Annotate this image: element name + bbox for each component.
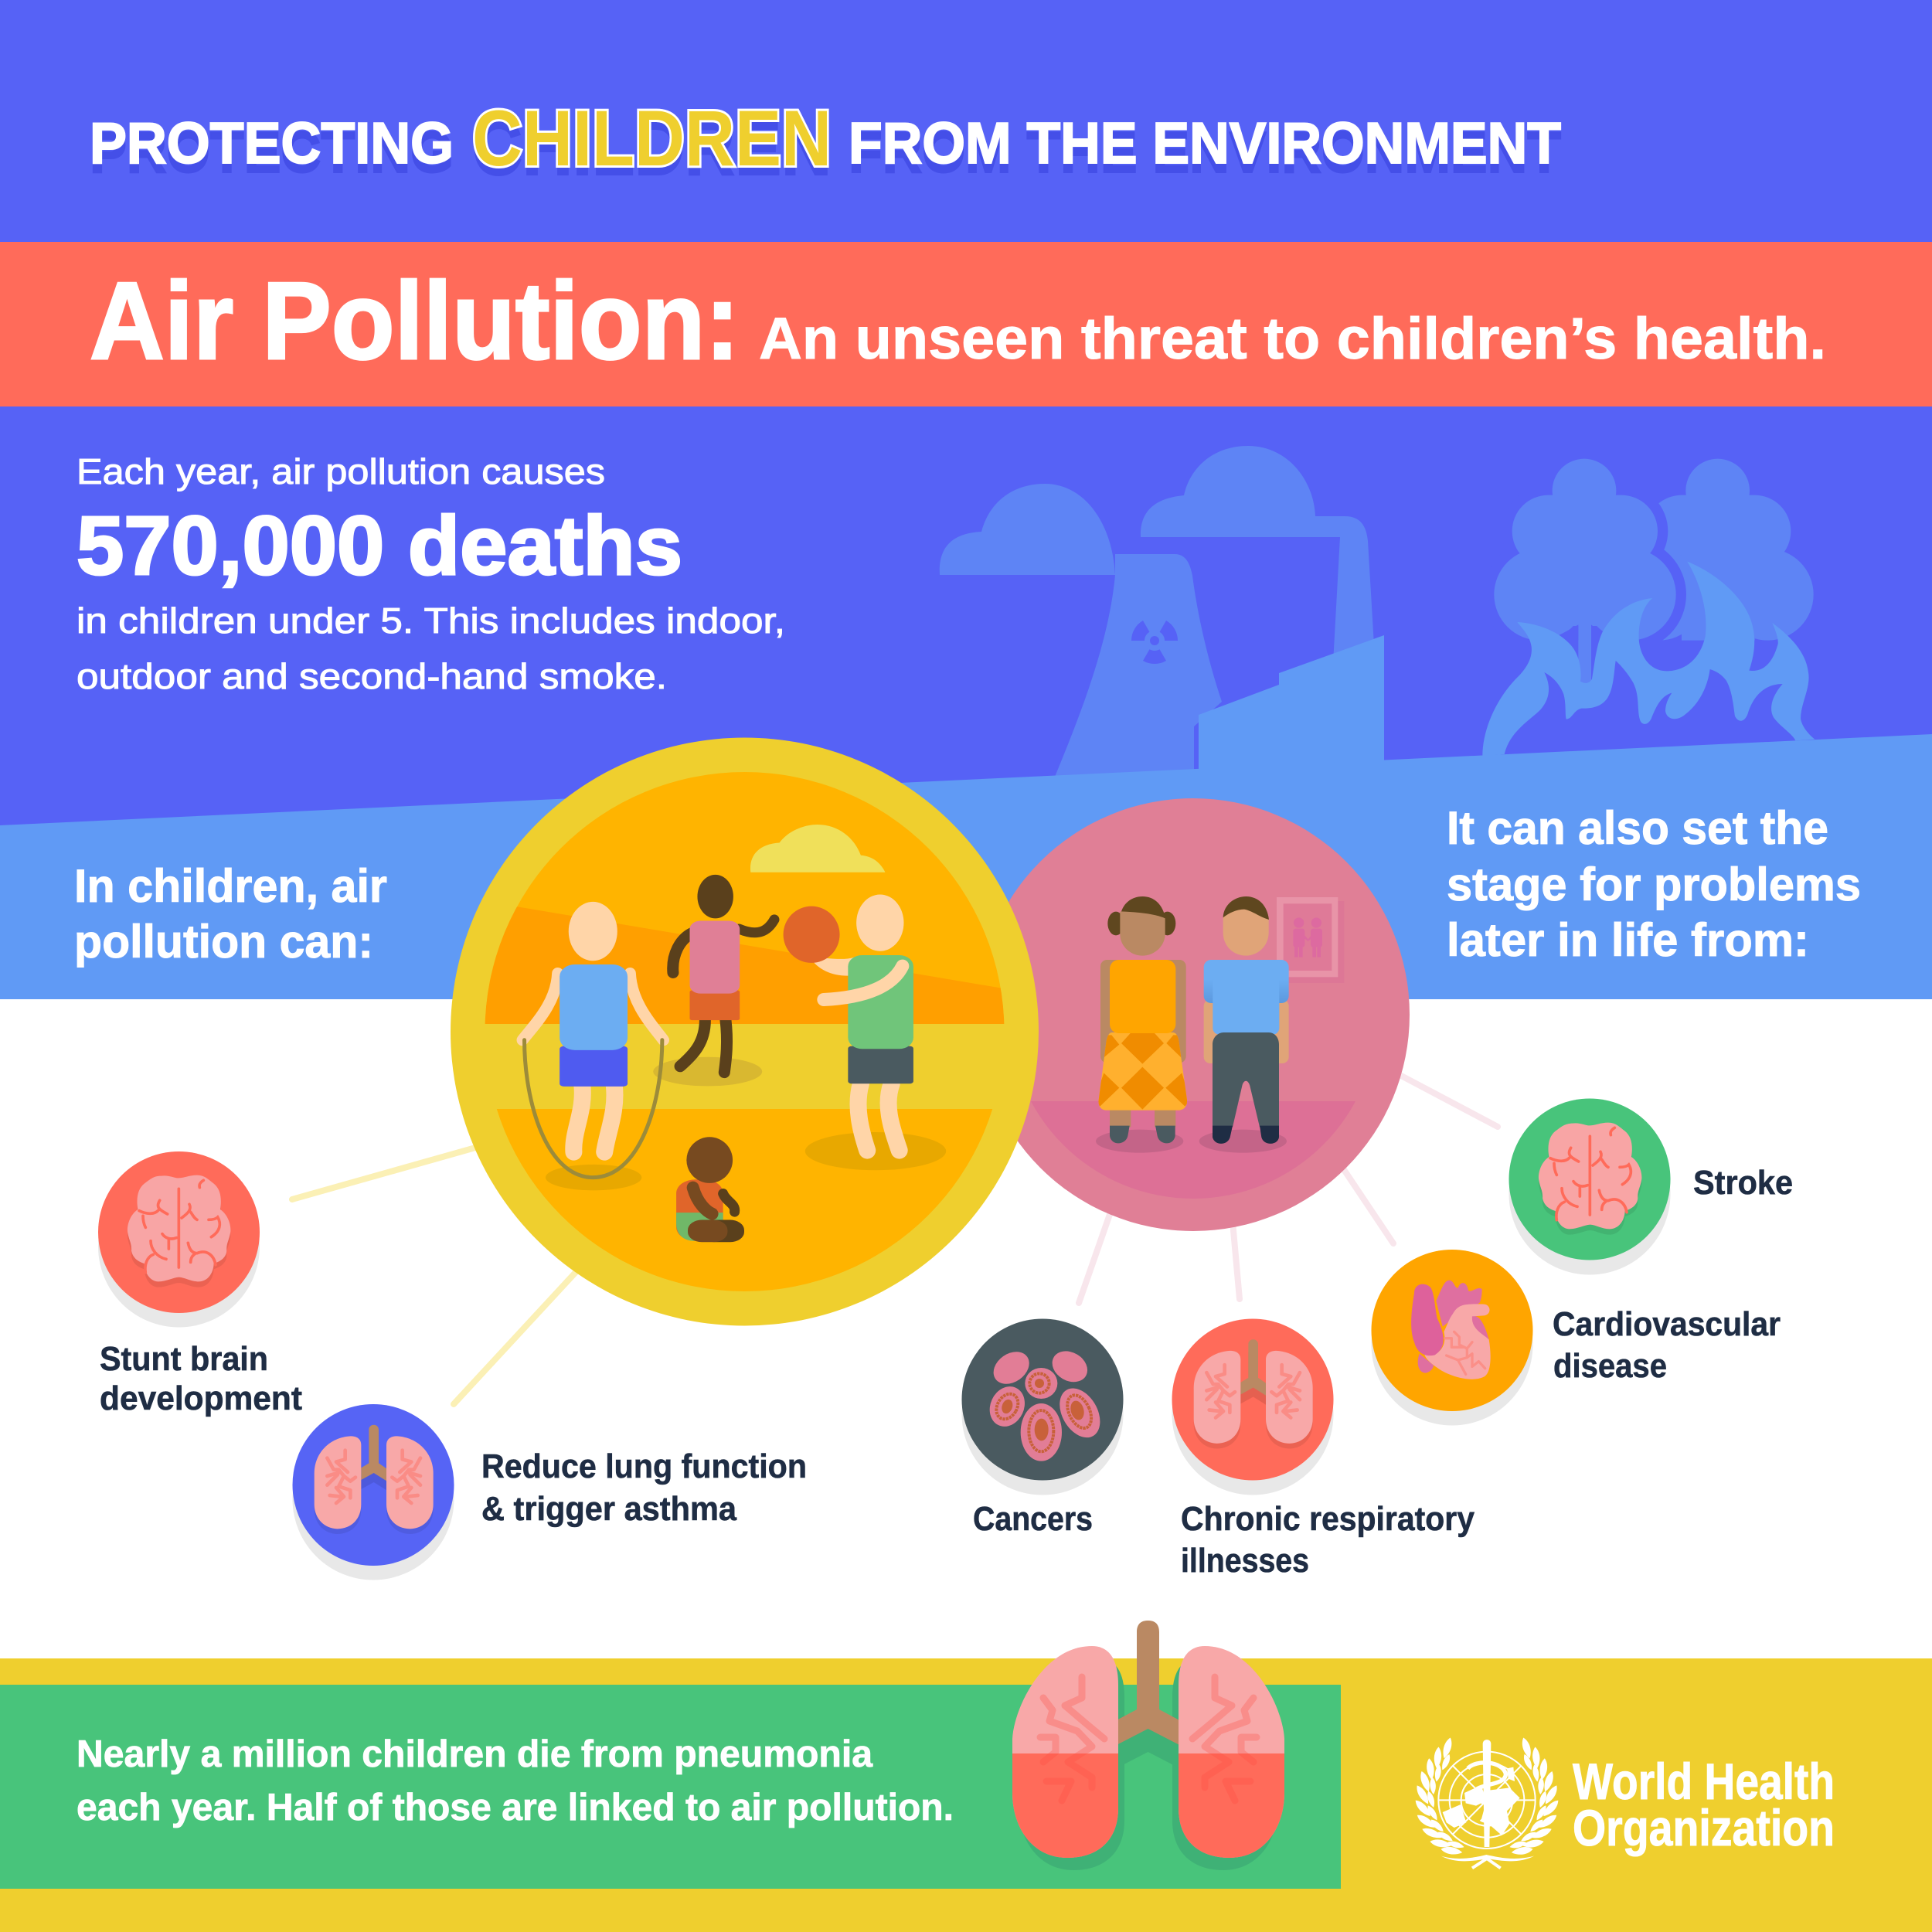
label: cardiovascular: disease — [1553, 1347, 1667, 1385]
ground band — [0, 734, 1932, 1000]
title: FROM THE ENVIRONMENT — [849, 120, 1561, 185]
label: stroke: Stroke — [1693, 1164, 1793, 1202]
heading: later in life: later in life from: — [1447, 914, 1809, 966]
figure: man — [1199, 896, 1289, 1153]
title: PROTECTING — [90, 120, 454, 185]
title — [90, 94, 1561, 192]
icon: heart — [1371, 1250, 1533, 1425]
heading: later in life: stage for problems — [1447, 859, 1861, 910]
banner: air pollution heading — [0, 242, 1932, 406]
panel: pneumonia callout: Nearly a million children die from pneumonia — [77, 1733, 873, 1775]
title: PROTECTING — [90, 111, 454, 175]
hill — [479, 900, 1012, 1024]
text block: deaths statistic: outdoor and second-hand smoke. — [77, 656, 667, 696]
label: reduce lung function: & trigger asthma — [481, 1490, 736, 1528]
label: cancers: Cancers — [973, 1500, 1093, 1538]
icon: cancer cells — [961, 1318, 1124, 1495]
title: CHILDREN — [472, 94, 832, 182]
panel: children playing circle — [451, 737, 1039, 1326]
wordmark: World Health — [1573, 1753, 1835, 1810]
panel: pneumonia callout: each year. Half of those are linked to air pollution. — [77, 1787, 954, 1828]
banner: air pollution heading: Air Pollution: — [90, 260, 740, 383]
illustration: cooling tower, factory chimney — [940, 446, 1384, 777]
icon: lungs on blue — [292, 1404, 454, 1580]
kid with dark skin — [673, 875, 774, 1073]
white content area — [0, 999, 1932, 1658]
illustration: burning trees — [1482, 459, 1815, 756]
shadows under kids — [546, 1057, 946, 1190]
kid skipping rope — [522, 902, 663, 1178]
wordmark — [1573, 1753, 1835, 1856]
illustration: large lungs — [1012, 1621, 1284, 1870]
label: stunt brain: Stunt brain — [100, 1340, 268, 1378]
label: chronic respiratory: illnesses — [1181, 1542, 1309, 1580]
text block: deaths statistic: 570,000 deaths — [77, 498, 682, 592]
emblem — [1413, 1736, 1561, 1868]
title: CHILDREN — [472, 104, 832, 192]
label: cardiovascular — [1553, 1305, 1781, 1385]
figure: framed picture — [1277, 897, 1344, 983]
label: reduce lung function: Reduce lung function — [481, 1447, 807, 1485]
title: FROM THE ENVIRONMENT — [849, 111, 1561, 175]
label: stunt brain — [100, 1340, 302, 1417]
label: cardiovascular: Cardiovascular — [1553, 1305, 1781, 1343]
figure: woman — [1095, 896, 1190, 1153]
wordmark: Organization — [1573, 1799, 1835, 1856]
seated baby — [676, 1137, 744, 1242]
panel: pneumonia callout — [0, 1685, 1341, 1889]
heading: later in life: It can also set the — [1447, 802, 1828, 854]
logo: World Health Organization — [1413, 1736, 1835, 1868]
text block: deaths statistic: Each year, air pollution causes — [77, 451, 605, 492]
icon: lungs on red — [1172, 1318, 1334, 1495]
label: stunt brain: development — [100, 1379, 302, 1417]
text block: deaths statistic: in children under 5. This includes indoor, — [77, 600, 785, 641]
heading: in children — [74, 860, 387, 968]
icon: brain on green — [1509, 1099, 1671, 1275]
cloud — [750, 825, 885, 872]
heading: in children: pollution can: — [74, 916, 373, 968]
heading: later in life — [1447, 802, 1861, 966]
footer band — [0, 1658, 1932, 1932]
banner: air pollution heading: An unseen threat to children’s health. — [759, 306, 1826, 372]
panel: adults circle — [977, 798, 1410, 1231]
label: chronic respiratory: Chronic respiratory — [1181, 1500, 1475, 1538]
label: reduce lung function — [481, 1447, 807, 1528]
text block: deaths statistic — [77, 451, 785, 696]
heading: in children: In children, air — [74, 860, 387, 912]
ball and kid — [784, 895, 913, 1151]
sand band — [464, 1024, 1020, 1109]
label: chronic respiratory — [1181, 1500, 1475, 1580]
icon: brain on red — [98, 1151, 260, 1328]
